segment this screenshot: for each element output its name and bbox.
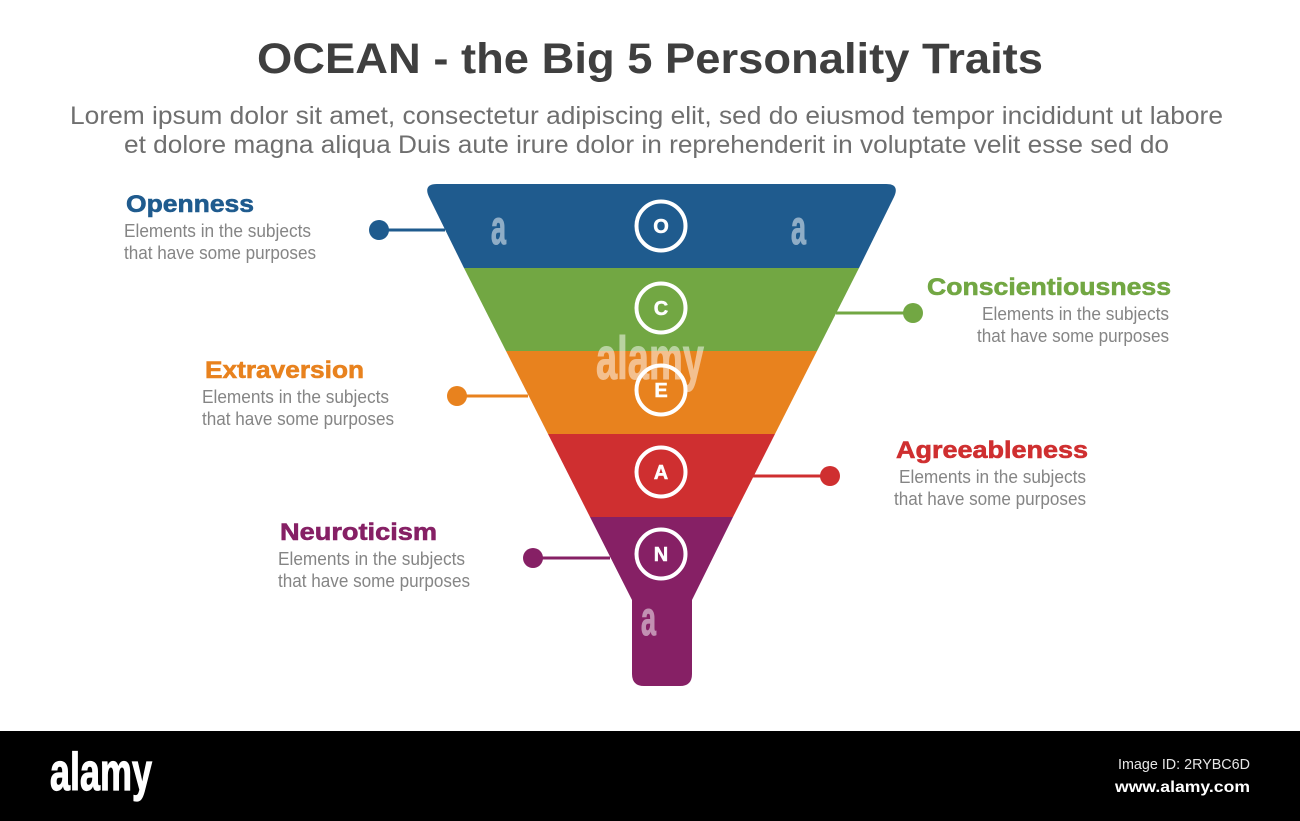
band: neuroticism with funnel neck: N	[654, 544, 668, 566]
label: openness	[124, 191, 316, 263]
label: agreeableness: that have some purposes	[894, 489, 1086, 509]
subtitle text block: et dolore magna aliqua Duis aute irure dolor in reprehenderit in voluptate velit esse sed do	[124, 131, 1169, 159]
label: agreeableness: Agreeableness	[896, 437, 1088, 464]
connector: agreeableness	[753, 466, 840, 486]
connector: neuroticism	[523, 548, 610, 568]
band: agreeableness: A	[654, 462, 668, 484]
subtitle text block	[70, 102, 1223, 159]
label: agreeableness	[894, 437, 1088, 509]
band: conscientiousness: C	[654, 298, 668, 320]
label: neuroticism: that have some purposes	[278, 571, 470, 591]
label: conscientiousness: Elements in the subjects	[982, 304, 1169, 324]
footer logo: alamy	[50, 743, 152, 802]
band: conscientiousness	[464, 268, 859, 351]
label: agreeableness: Elements in the subjects	[899, 467, 1086, 487]
label: extraversion: that have some purposes	[202, 409, 394, 429]
connector: conscientiousness	[836, 303, 923, 323]
label: extraversion: Elements in the subjects	[202, 387, 389, 407]
band: agreeableness	[548, 434, 775, 517]
band: neuroticism with funnel neck	[590, 517, 733, 686]
label: openness: Elements in the subjects	[124, 221, 311, 241]
website: www.alamy.com	[1114, 779, 1250, 796]
label: neuroticism: Elements in the subjects	[278, 549, 465, 569]
label: conscientiousness: that have some purposes	[977, 326, 1169, 346]
label: neuroticism	[278, 519, 470, 591]
watermark: alamy	[596, 325, 704, 392]
label: extraversion	[202, 357, 394, 429]
connector: openness	[369, 220, 445, 240]
label: conscientiousness: Conscientiousness	[927, 274, 1171, 301]
watermark	[491, 202, 806, 646]
band: extraversion	[506, 351, 817, 434]
band: extraversion: E	[654, 380, 668, 402]
title: OCEAN - the Big 5 Personality Traits	[257, 35, 1043, 83]
subtitle text block: Lorem ipsum dolor sit amet, consectetur adipiscing elit, sed do eiusmod tempor incididunt ut labore	[70, 102, 1223, 130]
label: extraversion: Extraversion	[205, 357, 364, 384]
label: neuroticism: Neuroticism	[280, 519, 437, 546]
band: openness: O	[653, 216, 669, 238]
watermark: a	[491, 202, 506, 255]
label: openness: that have some purposes	[124, 243, 316, 263]
watermark: a	[641, 593, 656, 646]
image id: Image ID: 2RYBC6D	[1118, 756, 1250, 773]
funnel chart	[427, 184, 896, 686]
footer bar	[0, 731, 1300, 821]
watermark: a	[791, 202, 806, 255]
connector: extraversion	[447, 386, 528, 406]
label: openness: Openness	[126, 191, 254, 218]
label: conscientiousness	[927, 274, 1171, 346]
band: openness	[427, 184, 896, 268]
